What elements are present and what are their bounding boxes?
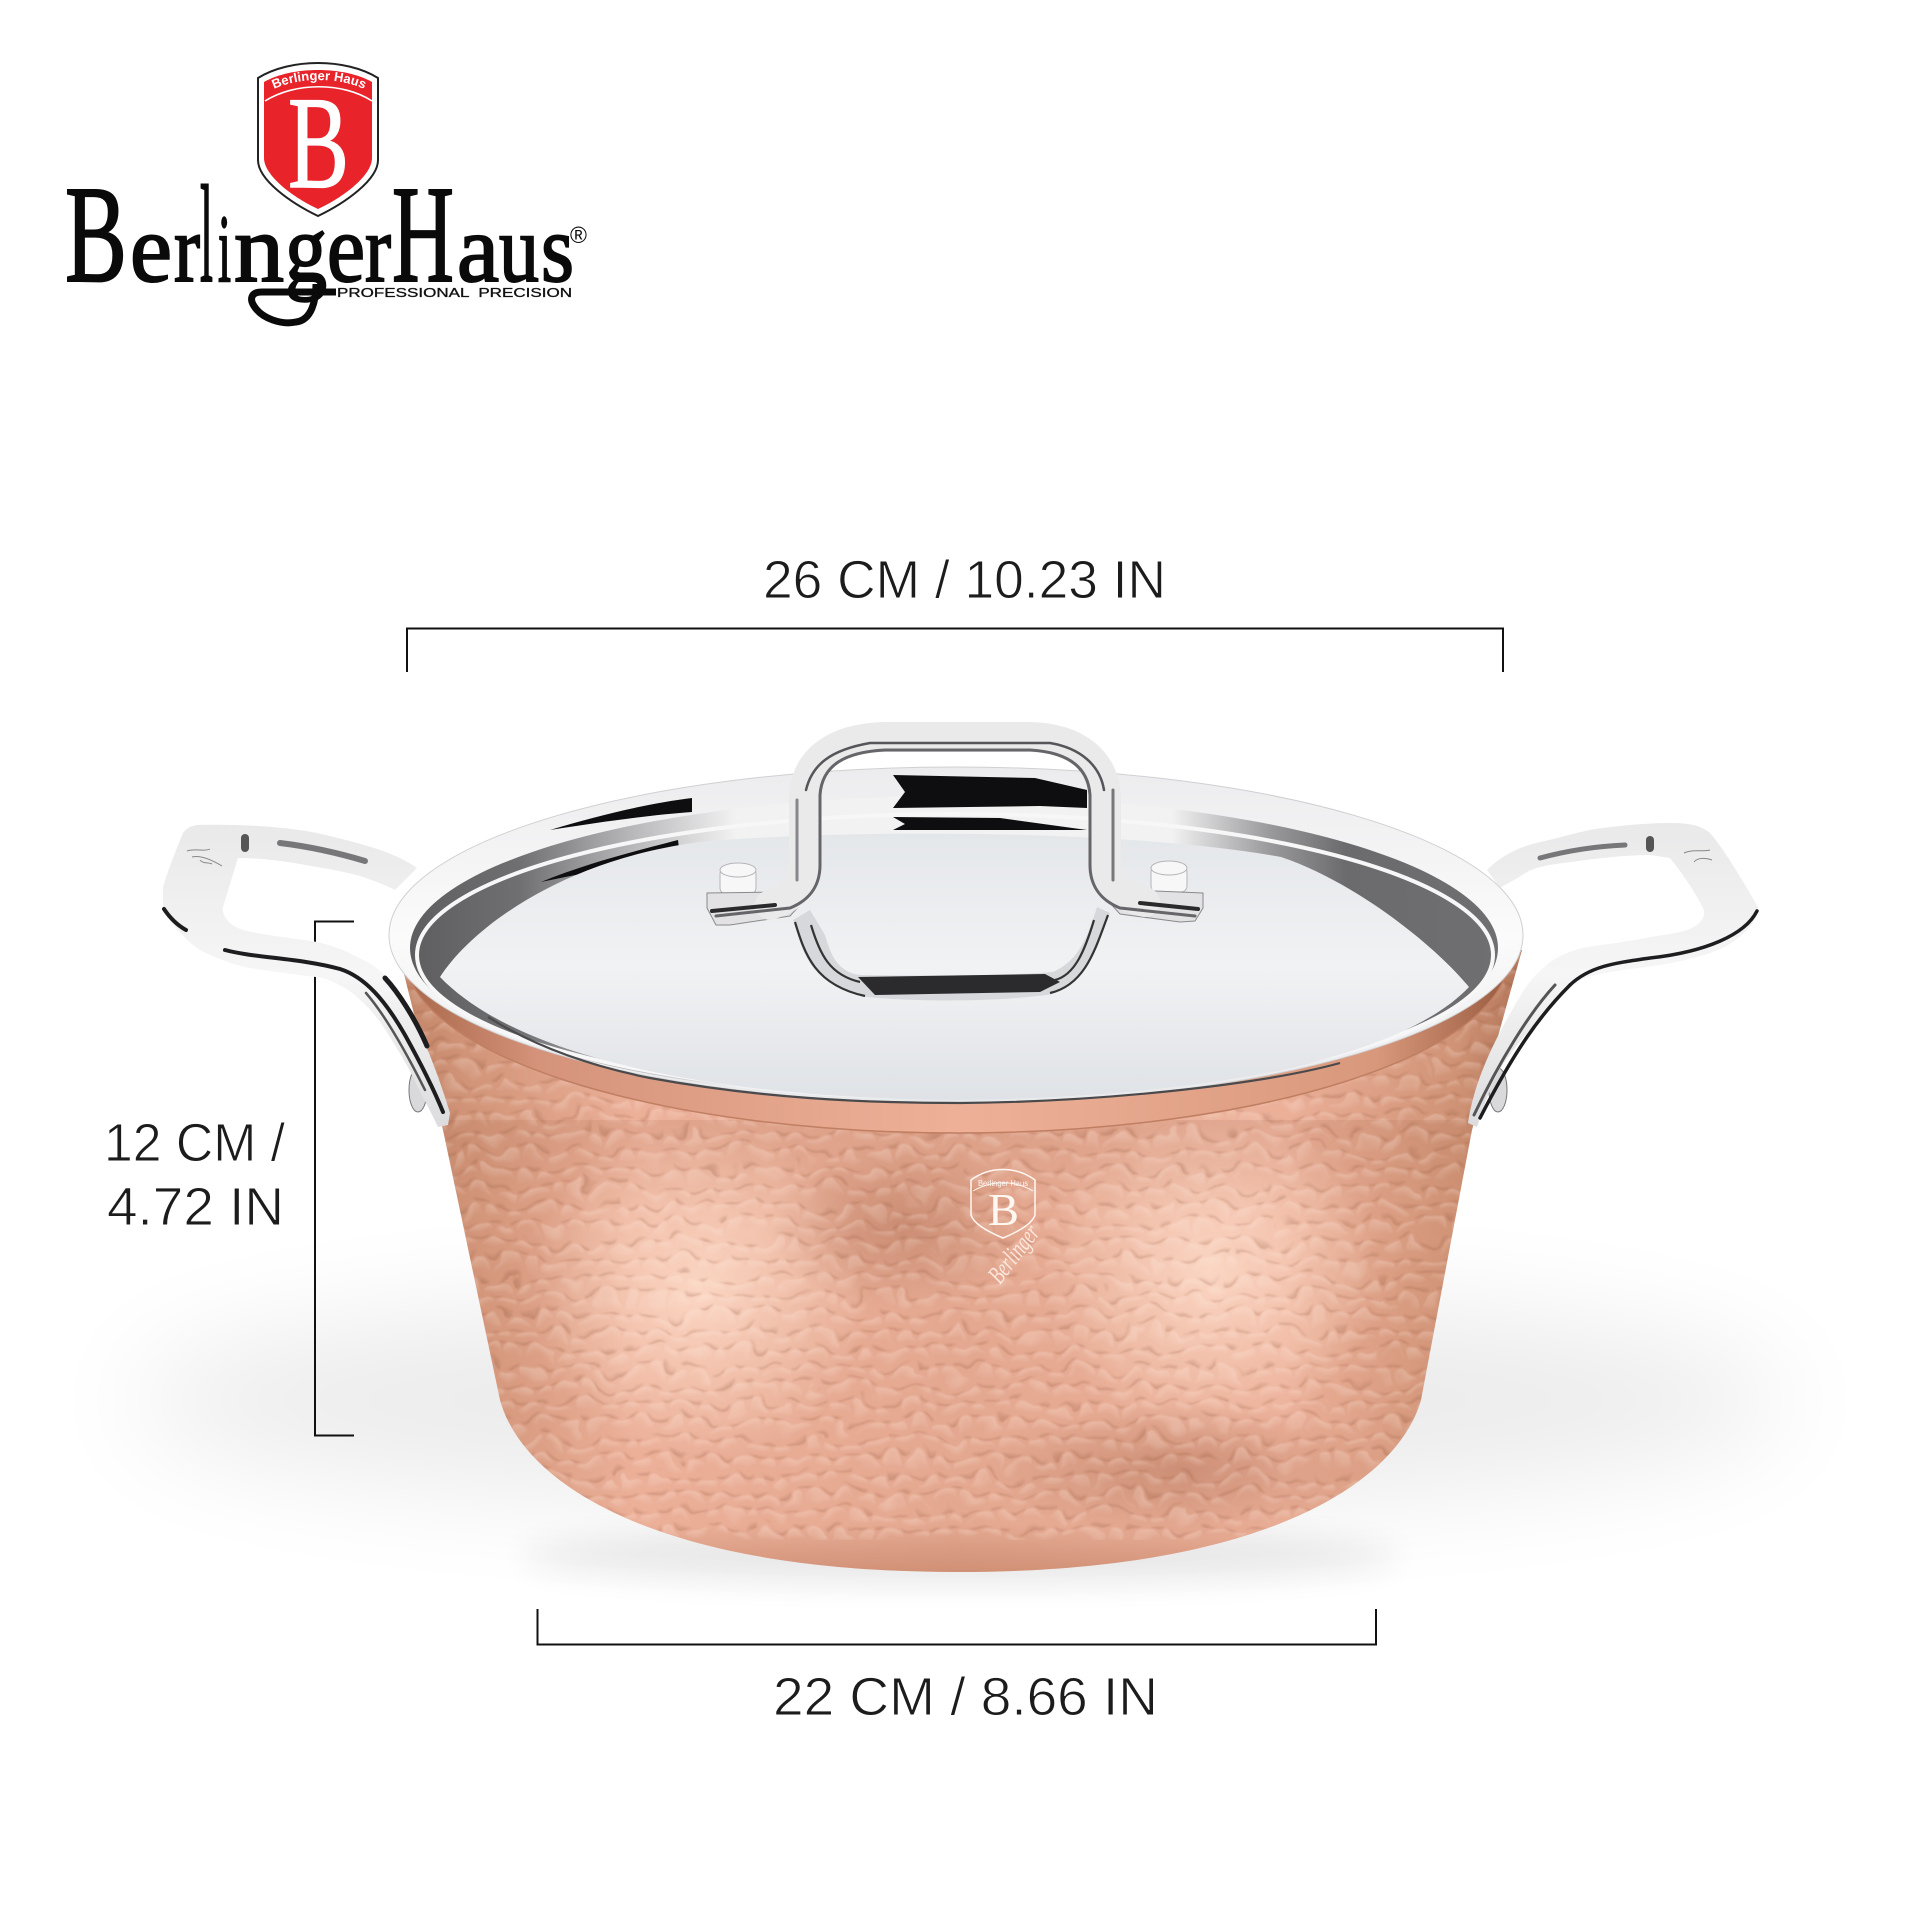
top width bracket xyxy=(407,628,1503,672)
hammered texture xyxy=(380,940,1540,1540)
body emblem: B xyxy=(988,1184,1019,1235)
right pot handle xyxy=(1468,823,1758,1127)
signature: Berlinger xyxy=(982,1218,1046,1289)
right handle engraved mark xyxy=(1684,850,1712,862)
logo shield: B xyxy=(288,69,349,216)
lid reflection of handle xyxy=(793,907,1110,1000)
logo g tail xyxy=(252,284,336,323)
logo shield: Berlinger Haus xyxy=(271,72,366,88)
lid handle rivets xyxy=(720,861,1187,894)
logo wordmark: s xyxy=(541,195,574,302)
stainless lid xyxy=(389,767,1523,1103)
logo: Berlinger Haus xyxy=(65,62,587,326)
dark reflection strip xyxy=(858,974,1060,995)
logo registered mark: ® xyxy=(570,222,587,248)
logo wordmark: i xyxy=(218,195,231,302)
lid handle brackets xyxy=(707,890,1203,925)
right handle rivet xyxy=(1489,1068,1507,1112)
logo wordmark: g xyxy=(285,195,327,302)
lid dark reflections xyxy=(541,775,1087,882)
logo shield xyxy=(257,62,379,218)
top width label: 26 CM / 10.23 IN xyxy=(763,550,1166,610)
logo wordmark: e xyxy=(130,195,172,302)
left handle reflections xyxy=(164,838,443,1112)
left handle engraved mark xyxy=(187,849,222,866)
floor shadow xyxy=(130,1290,1790,1584)
body emblem: Berlinger Haus xyxy=(978,1179,1028,1188)
lid flat mirror xyxy=(440,834,1469,1100)
lid outer rim xyxy=(389,767,1523,1103)
right handle reflections xyxy=(1474,840,1757,1118)
logo wordmark: a xyxy=(457,195,499,302)
height label: 4.72 IN xyxy=(107,1177,284,1237)
copper pot body xyxy=(404,950,1522,1572)
logo wordmark: n xyxy=(234,195,284,302)
lid handle wire xyxy=(712,737,1198,916)
bottom width bracket xyxy=(538,1609,1376,1644)
logo wordmark: r xyxy=(365,195,391,302)
logo tagline: PROFESSIONAL PRECISION xyxy=(337,285,572,300)
logo wordmark: B xyxy=(65,158,127,312)
rim lower edge xyxy=(488,1017,1340,1103)
body highlights xyxy=(516,1120,1396,1572)
height label xyxy=(104,1113,285,1237)
height bracket xyxy=(315,922,354,1436)
logo wordmark: e xyxy=(327,195,365,302)
logo wordmark: r xyxy=(174,195,200,302)
logo wordmark: l xyxy=(200,158,213,312)
left pot handle xyxy=(163,825,450,1127)
height label: 12 CM / xyxy=(104,1113,285,1173)
body emblem xyxy=(970,1168,1038,1285)
lid inner well xyxy=(410,796,1498,1100)
logo wordmark: u xyxy=(499,195,539,302)
lid inner ring xyxy=(417,814,1493,1096)
logo wordmark: H xyxy=(392,158,454,312)
handle shading xyxy=(716,750,1195,916)
bottom width label: 22 CM / 8.66 IN xyxy=(773,1667,1158,1727)
left handle rivet xyxy=(409,1068,427,1112)
copper band under rim xyxy=(410,980,1504,1134)
